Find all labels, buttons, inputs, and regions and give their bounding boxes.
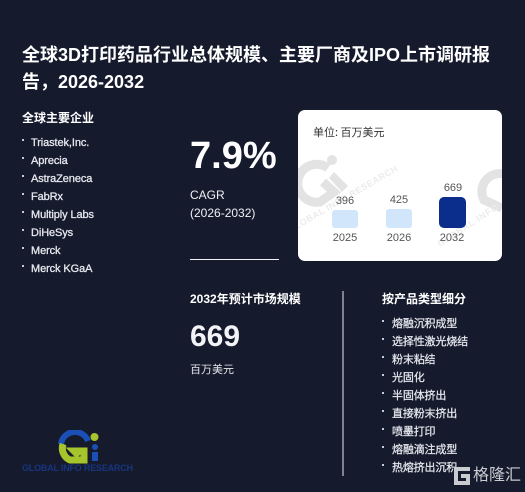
watermark: Gi logos: GLOBAL INFO — [436, 202, 500, 249]
x axis labels: 2032 — [440, 232, 464, 244]
company list: DiHeSys — [31, 227, 73, 239]
product type list: 热熔挤出沉积 — [392, 462, 457, 474]
company list: Merck — [31, 245, 60, 257]
panel: by product type — [382, 292, 468, 474]
panel: global key companies — [22, 111, 94, 275]
panel: 2032 market size — [190, 292, 301, 376]
CAGR label: (2026-2032) — [190, 206, 255, 220]
logo: Gelonghui watermark — [454, 466, 521, 485]
market size unit: 百万美元 — [190, 364, 234, 376]
heading: market size: 2032年预计市场规模 — [190, 292, 301, 306]
bar 2026 — [386, 194, 412, 228]
value label 425: 425 — [390, 194, 408, 206]
CAGR label: CAGR — [190, 188, 225, 202]
wordmark: 格隆汇 — [473, 467, 521, 484]
heading: companies: 全球主要企业 — [22, 111, 94, 125]
watermark: Gi logos — [298, 155, 502, 249]
divider line — [190, 259, 279, 260]
company list: FabRx — [31, 191, 63, 203]
value label 396: 396 — [336, 195, 354, 207]
x axis labels: 2026 — [387, 232, 411, 244]
bar — [386, 209, 412, 228]
x axis labels — [333, 232, 464, 244]
product type list: 喷墨打印 — [392, 426, 435, 438]
panel: CAGR — [190, 135, 279, 260]
market size value: 669 — [190, 320, 240, 353]
company list: Aprecia — [31, 155, 68, 167]
bar 2025 — [332, 195, 358, 228]
vertical divider — [342, 291, 344, 476]
value label 669: 669 — [444, 182, 462, 194]
product type list: 直接粉末挤出 — [392, 408, 457, 420]
company list — [22, 137, 94, 275]
product type list: 选择性激光烧结 — [392, 336, 468, 348]
chart unit label: 单位: 百万美元 — [313, 124, 385, 140]
logo: Global Info Research — [22, 430, 133, 473]
bar — [332, 210, 358, 228]
panel: bar chart card — [298, 110, 502, 261]
company list: Multiply Labs — [31, 209, 94, 221]
CAGR value: 7.9% — [190, 135, 277, 177]
product type list — [382, 318, 468, 474]
product type list: 半固体挤出 — [392, 390, 446, 402]
product type list: 粉末粘结 — [392, 354, 435, 366]
bar — [439, 197, 466, 228]
product type list: 光固化 — [392, 372, 425, 384]
logo: Global Info Research: GLOBAL INFO RESEARCH — [22, 463, 133, 473]
icon: G mark — [454, 467, 470, 485]
company list: Triastek,Inc. — [31, 137, 89, 149]
product type list: 熔融沉积成型 — [392, 318, 457, 330]
bar 2032 — [439, 182, 466, 228]
x axis labels: 2025 — [333, 232, 357, 244]
heading: product type: 按产品类型细分 — [382, 292, 466, 306]
company list: Merck KGaA — [31, 263, 92, 275]
CAGR label — [190, 188, 255, 220]
title: 全球3D打印药品行业总体规模、主要厂商及IPO上市调研报告，2026-2032 — [22, 45, 490, 92]
product type list: 熔融滴注成型 — [392, 444, 457, 456]
company list: AstraZeneca — [31, 173, 92, 185]
